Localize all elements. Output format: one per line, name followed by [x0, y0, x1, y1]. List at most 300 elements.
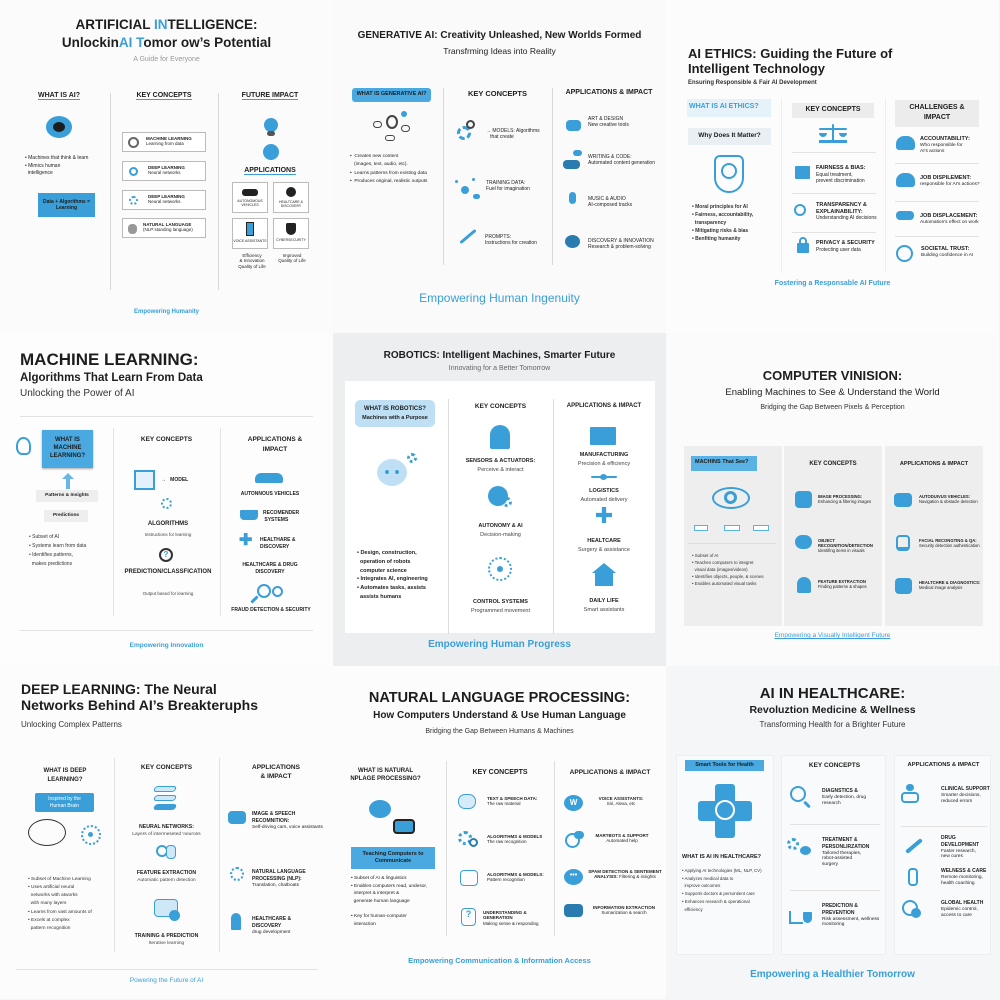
concepts: TREATMENT & [822, 837, 857, 843]
callout: inspired by brain [35, 793, 94, 812]
applications: PROCESSING (NLP): [252, 876, 302, 882]
bullets: • Identifies patterns, [29, 552, 73, 558]
bullets [25, 155, 88, 176]
title: AI IN HEALTHCARE: [760, 685, 905, 702]
subtitle: Ensuring Responsible & Fair AI Development [688, 80, 817, 86]
applications list: ART & DESIGN [588, 116, 623, 122]
bullets: • Enables automated visual tasks [692, 581, 757, 586]
applications: HEALTCHRE & DIAGNOSTICS: [919, 580, 980, 585]
bullets: visual data (images/videos) [694, 567, 748, 572]
panel: generative ai [333, 0, 666, 333]
heading: applications: APPLICATIONS & IMPACT [567, 403, 641, 409]
applications: Automated help [606, 838, 638, 843]
concepts: PREDICTION/CLASSFICATION [125, 569, 211, 575]
concept boxes: NATURAL LANGUAGE [143, 222, 191, 227]
applications: CLINICAL SUPPORT [941, 786, 990, 792]
callout: machines that see: MACHINS That See? [695, 459, 748, 465]
concept boxes [122, 132, 206, 238]
application tiles: & Innovation [239, 258, 265, 263]
challenges list: responsible for AI's actions? [920, 182, 980, 187]
icon: speech to computer [369, 800, 415, 834]
heading: key concepts [792, 103, 874, 118]
column: what is [676, 755, 774, 955]
concepts [132, 786, 201, 946]
bullets [28, 876, 92, 931]
bullets: • Systems learn from data [29, 543, 86, 549]
bullets: • Machines that think & learn [25, 155, 88, 161]
heading: challenges: CHALLENGES & [909, 104, 965, 111]
bullets [351, 876, 427, 927]
applications: NATURAL LANGUAGE [252, 869, 306, 875]
footer: Empowering Human Ingenuity [419, 291, 580, 305]
subtitle: Enabling Machines to See & Understand the World [725, 387, 940, 398]
panel: machine learning [0, 333, 333, 666]
callout: what is robotics: Machines with a Purpose [362, 415, 428, 421]
arrow up [62, 473, 74, 489]
panel: computer vision [666, 333, 999, 666]
applications: FACIAL RECONGTING & QA: [919, 538, 977, 543]
concepts: IMAGE PROCESSING: [818, 494, 862, 499]
title: Networks Behind AI’s Breakteruphs [21, 697, 258, 713]
challenges list: Who responsible for [920, 143, 963, 148]
flow diagram [694, 525, 769, 531]
heading: what is generative ai [352, 88, 431, 102]
heading: what is ai ethics: WHAT IS AI ETHICS? [689, 103, 759, 110]
concepts [124, 470, 212, 596]
applications [231, 473, 311, 613]
heading: what is ai in healthcare: WHAT IS AI IN HEALTHCARE? [682, 854, 761, 860]
column: key concepts [781, 755, 886, 955]
heading: what is nlp [350, 768, 421, 782]
applications: Medical image analysis [919, 585, 962, 590]
applications: AUTONNOUS VEHICLES [241, 491, 299, 497]
panel: ai in healthcare [666, 666, 999, 999]
heading: applications: APPLICATIONS [244, 167, 296, 174]
concepts: TEXT & SPEECH DATA: [487, 796, 537, 801]
concepts: monitoring [822, 922, 844, 927]
title: AI ETHICS: Guiding the Future of [688, 46, 892, 61]
bullets: • Uses artificial neural [28, 885, 74, 890]
applications: Security detection authentication [919, 543, 980, 548]
heading: what is nlp: NPLAGE PROCESSING? [350, 776, 421, 782]
applications: IMAGE & SPEECH [252, 811, 295, 817]
heading: what is deep learning: WHAT IS DEEP [44, 768, 86, 774]
heading: what is ai: WHAT IS AI? [38, 92, 80, 99]
heading: challenges: IMPACT [924, 114, 950, 121]
applications list: AI-composed tracks [588, 202, 632, 208]
bullets: • Teaches computers to integret [692, 560, 754, 565]
heading: applications: APPLICATIONS [252, 764, 300, 771]
callout: data + algorithms [38, 193, 95, 217]
applications: Navigation & obstacle detection [919, 499, 978, 504]
callout: inspired by brain: Human Brain [50, 802, 79, 808]
bullets: computer science [360, 568, 407, 574]
panel: ai ethics [666, 0, 999, 333]
bullets: with many layers [31, 901, 66, 906]
subtitle: Innovating for a Better Tomorrow [449, 365, 550, 372]
bullets: • Mitigating risks & bias [692, 228, 748, 234]
concept boxes: MACHINE LEARNING [146, 136, 192, 141]
callout: teaching computers: Communicate [375, 858, 411, 864]
heading: key concepts: KEY CONCEPTS [468, 89, 527, 98]
concepts: DIAGNSTICS & [822, 788, 858, 794]
concepts: ? [164, 550, 168, 559]
bullets: transparency [695, 220, 726, 226]
concept boxes: Neural networks [148, 170, 181, 175]
tagline: Unlocking the Power of AI [20, 388, 135, 399]
challenges list: Automation's effect on work [920, 220, 979, 225]
applications: RECOMENDER [263, 510, 299, 516]
bullets: • Learns from vast amounts of [28, 910, 92, 915]
heading: future impact: FUTURE IMPACT [242, 92, 298, 99]
applications: W [570, 798, 577, 807]
bullets [350, 154, 428, 184]
concepts: prevent discrimination [816, 178, 865, 184]
concepts: surgery [822, 862, 838, 867]
concepts: Decision-making [480, 532, 521, 538]
applications: DISCOVERY [252, 923, 281, 929]
concepts [787, 786, 887, 946]
applications: GLOBAL HEALTH [941, 900, 983, 906]
bullets: makes predictions [32, 561, 72, 567]
bullets [357, 550, 428, 600]
concepts: PROMPTS: [485, 234, 511, 240]
bullets: intelligence [28, 170, 53, 176]
callout: inspired by brain: Inspired by the [48, 796, 81, 802]
bullets: • Identifies objects, people, & scenes [692, 574, 764, 579]
callout: what is robotics: WHAT IS ROBOTICS? [364, 406, 426, 412]
applications: SYSTEMS [264, 517, 288, 523]
applications list: MUSIC & AUDIO [588, 196, 626, 202]
bullets [29, 534, 86, 567]
callout: smart tools [685, 760, 764, 771]
concepts: TRAINING DATA: [486, 180, 525, 186]
concepts: robot-assisted [822, 856, 852, 861]
concepts: Fuel for imagination [486, 186, 530, 192]
concepts: TRANSPARENCY & [816, 202, 867, 208]
concepts: Programmed movement [471, 608, 530, 614]
icon: medical cross [698, 784, 752, 838]
applications: WELNESS & CARE [941, 868, 986, 874]
heading: key concepts: KEY CONCEPTS [141, 436, 192, 443]
concepts [794, 165, 877, 253]
concepts: Making sense & responding [483, 921, 539, 926]
applications: Translation, chatboats [252, 882, 299, 888]
bullets: networks with atworks [31, 893, 78, 898]
icon: idea cluster [373, 111, 410, 141]
panel: natural language processing [333, 666, 666, 999]
icon: scales [819, 124, 847, 143]
bullets: operation of robots [360, 559, 410, 565]
bullets: • Moral principles for AI [692, 204, 748, 210]
concepts: Identifing items in visuals [818, 548, 865, 553]
callout: machines that see [691, 456, 757, 471]
concepts: Equal treatment, [816, 172, 853, 178]
heading: key concepts: KEY CONCEPTS [136, 92, 192, 99]
bullets: • Design, construction, [357, 550, 417, 556]
title [688, 46, 892, 76]
concepts: ALGORITHMS & MODELS: [487, 872, 544, 877]
callout: what is ml: MACHINE [54, 445, 82, 451]
concepts: ALGORITHMS & MODELS [487, 834, 542, 839]
applications: RECOMNITION: [252, 818, 289, 824]
applications list: DISCOVERY & INNOVATION [588, 238, 654, 244]
applications: VOICE ASSISTANTS: [599, 796, 643, 801]
applications: Automated delivery [580, 497, 628, 503]
applications: health coaching [941, 880, 975, 886]
subheading: why does it matter: Why Does It Matter? [698, 132, 761, 139]
panel: artificial intelligence [0, 0, 333, 333]
bullets: interpret & interpret & [354, 891, 399, 896]
challenges list: Building confidence in AI [921, 253, 973, 258]
footer: Empowering a Healthier Tomorrow [750, 969, 915, 980]
challenges list: ACCOUNTABILITY: [920, 136, 970, 142]
heading: applications: APPLICATIONS & IMPACT [900, 461, 968, 467]
applications list: WRITING & CODE: [588, 154, 632, 160]
bullets [692, 204, 753, 242]
heading: key concepts: KEY CONCEPTS [805, 106, 861, 113]
icon: robot face [377, 453, 417, 486]
concepts: Understanding AI decisions [816, 215, 877, 221]
bullets: generate human language [354, 899, 410, 904]
concepts: Protecting user data [816, 247, 861, 253]
bullets [682, 867, 762, 913]
challenges list: SOCIETAL TRUST: [921, 246, 969, 252]
applications: MARTBOTS & SUPPORT [595, 833, 648, 838]
title: UnlockinAI Tomor ow’s Potential [62, 35, 271, 50]
applications: ANALYSIS: Filtering & insights [594, 874, 656, 879]
icon: brain to network [28, 819, 101, 846]
applications: ✚ [595, 503, 613, 528]
concepts: that create [490, 134, 514, 140]
tag: predictions: Predictions [53, 513, 79, 518]
concepts: PRIVACY & SECURITY [816, 240, 875, 246]
bullets: • Subset of Machine Learning [28, 877, 91, 882]
applications [901, 784, 992, 934]
column panels [684, 446, 782, 626]
bullets: (images, text, audio, etc). [354, 162, 408, 167]
concepts: Risk assessment, wellness [822, 916, 879, 922]
subtitle: How Computers Understand & Use Human Language [373, 710, 626, 721]
footer: Fostering a Responsable AI Future [775, 280, 890, 287]
heading: key concepts: KEY CONCEPTS [472, 769, 528, 776]
title: COMPUTER VINISION: [763, 368, 902, 383]
heading: applications [248, 436, 302, 453]
concepts: → MODELS: Algorithms [486, 128, 540, 134]
heading: key concepts: KEY CONCEPTS [475, 403, 526, 410]
bullets: • Learns patterns from existing data [350, 171, 427, 176]
application tiles: AUTONOMOUS [237, 199, 263, 203]
challenges list: JOB DISPILEMENT: [920, 175, 971, 181]
challenges list: JOB DISPLACEMENT: [920, 213, 977, 219]
icon: bulb and globe [263, 118, 279, 160]
title [21, 681, 258, 713]
icon: brain cloud [46, 116, 72, 138]
concepts: Output based for learning [143, 591, 193, 596]
concepts: SENSORS & ACTUATORS: [466, 458, 535, 464]
callout: data + algorithms: Learning [56, 205, 77, 211]
bullets: • Mimics human [25, 162, 60, 168]
concepts: Enhancing & filtering images [818, 499, 871, 504]
bullets: • Produces original, realistic outputs [350, 179, 427, 184]
concepts: Instructions for learning [145, 532, 191, 537]
subtitle: Revoluztion Medicine & Wellness [749, 704, 916, 716]
concepts: Tailored therapies, [822, 850, 861, 856]
heading: key concepts: KEY CONCEPTS [809, 461, 857, 467]
column: applications [894, 755, 991, 955]
callout: what is robotics [355, 400, 435, 427]
callout: what is ml: WHAT IS [55, 437, 80, 443]
concepts: Finding patterns & shapes [818, 584, 867, 589]
applications: DISCOVERY [260, 544, 289, 550]
concepts: FEATURE EXTRACTION [818, 579, 866, 584]
application tiles: CYBERSECURITY [276, 238, 306, 242]
concepts: NEURAL NETWORKS: [139, 824, 194, 830]
heading: applications [252, 764, 300, 780]
heading: applications: APPLICATIONS & IMPACT [566, 89, 652, 96]
applications: Sumarization & search [601, 910, 647, 915]
bullets: efficiency [684, 907, 703, 912]
heading: applications: APPLICATIONS & IMPACT [570, 769, 650, 776]
title: GENERATIVE AI: Creativity Unleashed, New Worlds Formed [358, 30, 641, 41]
application tiles: VOICE ASSISTANTS [233, 239, 267, 243]
applications: AUTODUIVUS VEHICLES: [919, 494, 970, 499]
callout: what is ml: LEARNING? [50, 453, 85, 459]
applications list [563, 116, 655, 250]
applications: DAILY LIFE [589, 598, 619, 604]
concepts: Iterative learning [149, 941, 184, 946]
panel: deep learning [0, 666, 333, 999]
bullets: • Subset of AI [29, 534, 59, 540]
concepts: GENERATION [483, 915, 513, 920]
applications: drug development [252, 930, 290, 934]
applications: HEALTHARE & [260, 537, 295, 543]
concepts: The raw recognition [487, 839, 527, 844]
applications: Surgery & assistance [578, 547, 630, 553]
concept boxes: Neural networks [148, 199, 181, 204]
challenges list [896, 136, 980, 262]
tagline: Transforming Health for a Brighter Future [760, 720, 905, 729]
concepts: CONTROL SYSTEMS [473, 599, 528, 605]
bullets: • Excels at complex [28, 918, 70, 923]
title: NATURAL LANGUAGE PROCESSING: [369, 690, 630, 706]
concepts: TRAINING & PREDICTION [135, 933, 198, 939]
footer: Empowering a Visually Intelligent Future [775, 632, 890, 639]
applications [578, 427, 630, 613]
applications: LOGISTICS [589, 488, 619, 494]
heading: applications: APPLICATIONS & IMPACT [908, 762, 979, 768]
concept boxes: (NLP:standing language) [143, 227, 193, 232]
icon: brain shield [714, 155, 744, 193]
footer: Empowering Humanity [134, 309, 199, 315]
applications: new cures [941, 854, 963, 859]
applications: Siri, Alexa, etc [607, 801, 635, 806]
applications: reduced errors [941, 798, 972, 804]
heading: key concepts: KEY CONCEPTS [141, 764, 192, 771]
bullets: • Benfiting humanity [692, 236, 740, 242]
applications: Smart assistants [584, 607, 624, 613]
applications [228, 811, 323, 934]
subtitle: Transfrming Ideas into Reality [443, 46, 556, 56]
title: ARTIFICIAL INTELLIGENCE: [76, 17, 258, 32]
icon: eye [712, 487, 750, 509]
application tiles: VEHICLES [241, 203, 259, 207]
subtitle: Algorithms That Learn From Data [20, 372, 203, 384]
footer: Empowering Communication & Information Access [408, 956, 591, 965]
applications: Self-driving cars, voice assistants [252, 824, 323, 830]
application tiles: Efficiency [242, 253, 262, 258]
footer: Empowering Human Progress [428, 639, 571, 650]
tag: patterns [36, 490, 98, 502]
title: MACHINE LEARNING: [20, 350, 198, 369]
heading: what is ai ethics [687, 99, 771, 117]
callout: teaching computers [351, 847, 435, 869]
concepts: EXPLAINABILITY: [816, 209, 863, 215]
applications list: Automated content generation [588, 160, 655, 166]
concepts: Instructions for creation [485, 240, 537, 246]
bullets: • Analyzes medical data to [682, 876, 733, 881]
heading: applications: & IMPACT [261, 773, 291, 780]
bullets: interaction [354, 922, 376, 927]
bullets: • Applying AI technologies (ML, NLP, CV) [682, 868, 762, 873]
concepts: UNDERSTANDING & [483, 910, 527, 915]
concepts: ? [466, 909, 471, 919]
application tiles: Quality of Life [238, 264, 266, 269]
concepts: ALGORITHMS [148, 521, 188, 527]
applications: Epidemic control, [941, 907, 978, 912]
bullets [692, 553, 764, 586]
applications: HEALTHCARE & DRUG [242, 562, 298, 568]
concept boxes: Learning from data [146, 141, 184, 146]
tagline: Bridging the Gap Between Pixels & Perception [760, 404, 905, 411]
concepts [455, 120, 540, 246]
bullets: • Enhances research & operational [682, 899, 750, 904]
applications: HEALTCARE [587, 538, 621, 544]
application tiles: Quality of Life [278, 258, 306, 263]
applications: INFORMATION EXTRACTION [593, 905, 655, 910]
concepts [458, 793, 558, 928]
concepts: Perceive & interact [477, 467, 524, 473]
applications list: New creative tools [588, 122, 629, 128]
concepts: FAIRNESS & BIAS: [816, 165, 866, 171]
concepts: The raw material [487, 801, 521, 806]
application tiles [232, 182, 309, 269]
bullets: pattern recognition [31, 926, 70, 931]
applications: ✚ [239, 532, 252, 549]
applications: DRUG DEVELOPMENT [941, 835, 979, 848]
applications: ••• [570, 872, 577, 879]
concepts: PREDICTION & PREVENTION [822, 903, 858, 916]
heading: applications: APPLICATIONS & [248, 436, 302, 443]
heading: what is deep learning [44, 768, 86, 783]
concept boxes: DEEP LEARNING [148, 165, 185, 170]
concept boxes: DEEP LEARNING [148, 194, 185, 199]
concepts: OBJECT RECOGNITION/DETECTION [818, 538, 873, 548]
applications: DISCOVERY [255, 569, 285, 575]
bullets: • Subset of AI & linguistics [351, 876, 407, 881]
concepts: Automatic pattern detection [137, 878, 196, 883]
applications: Smarter decisions, [941, 793, 981, 798]
tag: predictions [44, 510, 88, 522]
subtitle: A Guide for Everyone [133, 56, 200, 63]
footer: Powering the Future of AI [130, 977, 203, 984]
applications [564, 793, 666, 928]
callout: smart tools: Smart Tools for Health [695, 762, 754, 768]
applications: MANUFACTURING [580, 452, 628, 458]
heading: challenges [895, 100, 979, 127]
callout: data + algorithms: Data + Algorithms = [43, 199, 90, 205]
title [62, 17, 271, 50]
